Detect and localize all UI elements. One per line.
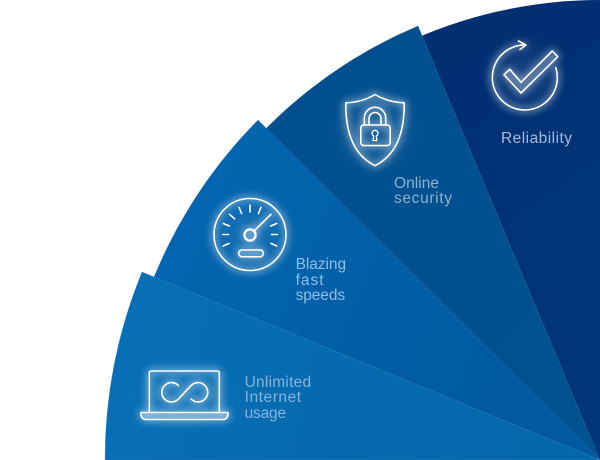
icon: speedometer xyxy=(202,187,298,283)
label: blazing fast speeds: Blazing xyxy=(296,256,346,273)
icon: laptop infinity xyxy=(128,355,240,435)
label: unlimited internet usage: Unlimited xyxy=(245,374,311,391)
icon: reliability check xyxy=(481,33,569,121)
label: online security: security xyxy=(394,190,452,207)
label: unlimited internet usage: Internet xyxy=(245,389,302,406)
label: unlimited internet usage: usage xyxy=(245,405,286,422)
label: reliability: Reliability xyxy=(501,130,572,147)
wedge: online security xyxy=(249,26,600,460)
label: online security xyxy=(394,175,452,207)
label: blazing fast speeds xyxy=(296,256,346,304)
icon: security shield xyxy=(327,82,423,178)
label: online security: Online xyxy=(394,175,439,192)
label: blazing fast speeds: speeds xyxy=(296,287,345,304)
label: blazing fast speeds: fast xyxy=(296,272,324,289)
wedge: reliability xyxy=(400,0,600,460)
wedge: unlimited internet usage xyxy=(105,272,600,460)
label: unlimited internet usage xyxy=(245,374,311,422)
wedge: blazing fast speeds xyxy=(145,120,600,460)
